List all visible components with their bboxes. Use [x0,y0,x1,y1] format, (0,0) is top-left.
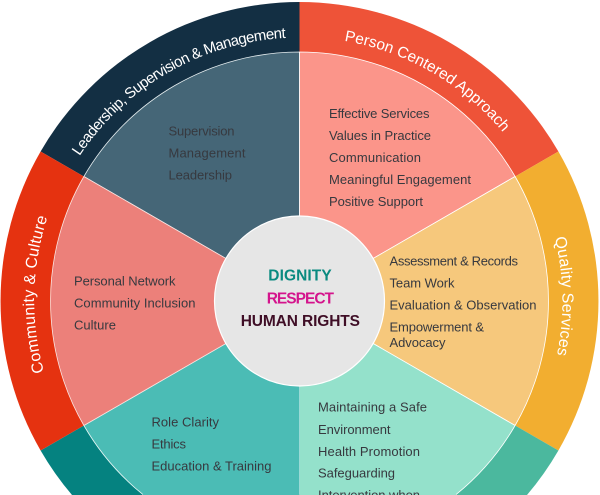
item list: quality: Advocacy [390,335,446,350]
ring label: quality: Quality Services [554,237,574,356]
ring label: leadership: Leadership, Supervision & Management [72,28,286,156]
item list: community: Culture [74,318,116,332]
item list: leadership: Management [168,146,246,160]
item list: lower left: Role Clarity [152,414,220,430]
panel: Person Centered Approach [299,2,558,258]
item list: lower left: Education & Training [152,458,272,474]
ring segment: lower right [300,301,558,495]
sector: leadership items [84,52,300,301]
item list: lower left: Ethics [152,436,186,452]
panel: lower left segment [41,301,299,495]
panel: lower right segment [300,301,558,495]
item list: leadership: Leadership [168,168,232,182]
item list: leadership: Supervision [168,124,234,138]
item list: person centered: Meaningful Engagement [329,172,471,187]
center hub [214,216,384,386]
sector: community items [51,176,300,426]
item list: leadership [168,124,246,182]
item list: quality: Team Work [390,276,455,290]
ring segment: lower left [41,301,299,495]
ring segment: leadership [41,2,299,301]
sector: quality items [300,176,548,426]
item list: lower right [318,400,427,495]
panel: Leadership, Supervision & Management [40,2,300,258]
item list: person centered: Values in Practice [329,128,431,143]
panel: Quality Services [374,152,598,450]
item list: lower right: Safeguarding [318,466,395,480]
item list: person centered: Positive Support [329,194,423,209]
item list: person centered [329,106,471,209]
item list: quality: Evaluation & Observation [390,298,536,312]
sector: lower right items [300,301,515,495]
item list: lower right: Environment [318,422,391,437]
panel: Community & Culture [0,152,226,450]
hub text: human rights: HUMAN RIGHTS [241,313,360,330]
item list: community: Personal Network [74,274,176,288]
ring label: person centered: Person Centered Approach [346,30,508,132]
item list: community: Community Inclusion [74,296,196,310]
ring segment: person centered [300,2,558,301]
ring label: community: Community & Culture [22,216,46,373]
sector: person centered items [300,52,515,301]
item list: person centered: Communication [329,150,421,165]
item list: quality [390,254,536,350]
hub text: dignity: DIGNITY [268,268,332,285]
item list: lower right: Health Promotion [318,444,420,459]
hub text: respect: RESPECT [267,291,335,308]
item list: quality: Empowerment & [390,320,484,334]
item list: person centered: Effective Services [329,106,430,121]
ring segment: quality [300,152,598,450]
sector: lower left items [84,301,300,495]
item list: lower left [152,414,272,474]
ring segment: community [1,152,300,450]
hub circle [214,216,384,386]
item list: lower right: Maintaining a Safe [318,400,427,414]
item list: quality: Assessment & Records [390,254,518,268]
item list: community [74,274,196,332]
